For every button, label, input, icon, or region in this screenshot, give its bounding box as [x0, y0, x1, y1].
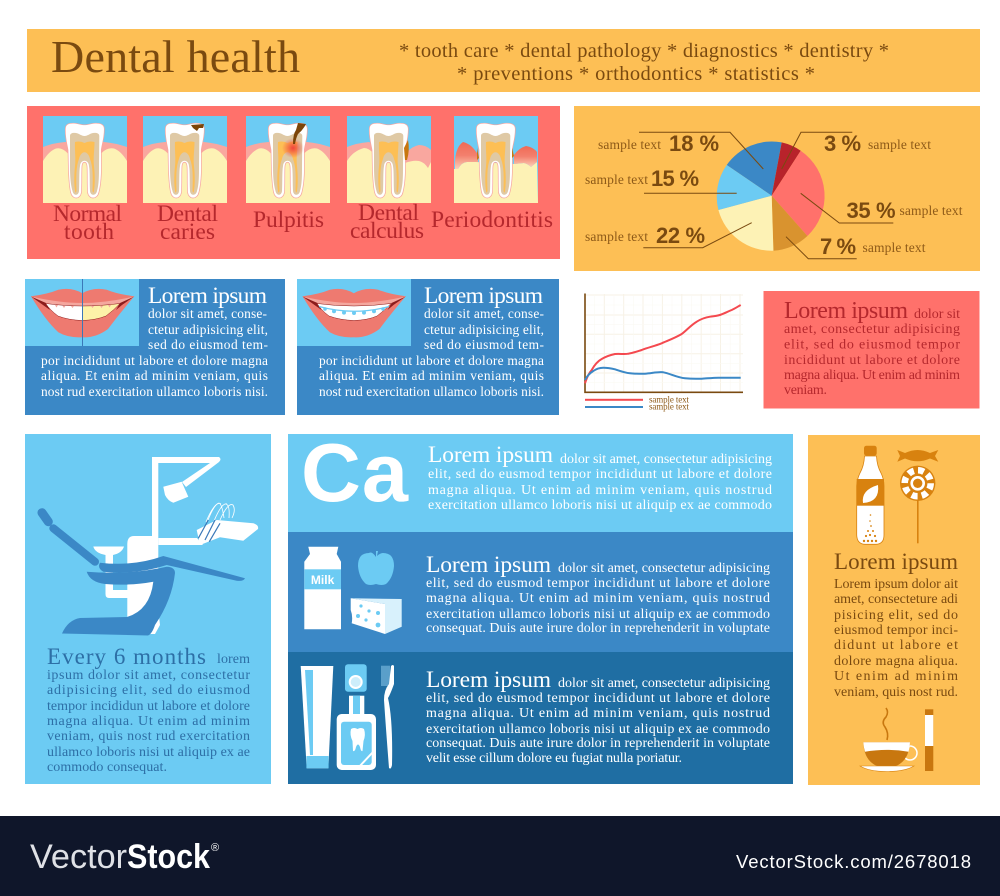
panel: dairy foods: [288, 532, 793, 652]
text: calcium: [428, 442, 772, 513]
icon: dental calculus: [347, 116, 431, 203]
text: braces: Lorem ipsum: [424, 283, 543, 309]
panel: calcium: [288, 426, 793, 532]
labels: tooth conditions: tooth: [64, 219, 114, 245]
icon: periodontitis: [454, 116, 538, 203]
text: braces: [319, 283, 544, 399]
callout: red note: veniam.: [784, 383, 827, 398]
pie label: 3 percent: 3 %: [824, 131, 861, 156]
callout: red note: amet, consectetur adipisicing: [784, 322, 960, 337]
leader lines: [639, 132, 893, 259]
icon: pulpitis: [246, 116, 330, 203]
footer brand: Stock: [127, 838, 210, 876]
icon: soda bottle: [857, 446, 884, 544]
icon: toothbrush: [381, 665, 394, 769]
panel: pie chart: [574, 106, 980, 271]
text: every 6 months: ipsum dolor sit amet, consectetur: [47, 668, 250, 683]
text: calcium: elit, sed do eusmod tempor incididunt ut labore et dolore: [428, 467, 772, 482]
text: dairy: elit, sed do eusmod tempor incididunt ut labore et dolore: [426, 576, 770, 591]
card: braces: [297, 279, 559, 415]
labels: tooth conditions: Periodontitis: [431, 207, 553, 233]
text: every 6 months: tempor incididun ut labore et dolore: [47, 699, 250, 714]
icon: dental chair: [42, 457, 258, 636]
text: harmful habits: Ut enim ad minim: [834, 669, 958, 684]
callout: red note: [764, 291, 980, 408]
text: harmful habits: didunt ut labore et: [834, 638, 958, 653]
text: braces: sed do eiusmod tem-: [424, 337, 544, 352]
text: every 6 months: Every 6 months: [47, 644, 206, 669]
pie label: 3 percent: sample text: [868, 137, 931, 152]
pie label: 35 percent: sample text: [900, 203, 963, 218]
text: whitening: Lorem ipsum: [148, 283, 267, 309]
line chart: [585, 294, 743, 412]
footer brand: Vector: [30, 838, 127, 876]
text: calcium: Lorem ipsum: [428, 442, 553, 468]
labels: tooth conditions: [53, 200, 553, 245]
text: dairy: Lorem ipsum: [426, 552, 551, 578]
text: every 6 months: veniam, quis nost rud exercitation: [47, 729, 250, 744]
text: every 6 months: adipisicing elit, sed do eiusmod: [47, 683, 250, 698]
icon: lollipop: [900, 466, 935, 543]
text: braces: por incididunt ut labore et dolore magna: [319, 353, 544, 368]
text: harmful habits: dolore magna aliqua.: [834, 654, 958, 669]
pie label: 15 percent: [585, 166, 699, 191]
callout: red note: magna aliqua. Ut enim ad minim: [784, 368, 960, 383]
pie label: 22 percent: sample text: [585, 229, 648, 244]
text: every 6 months: ullamco loboris nisi ut aliquip ex ae: [47, 745, 250, 760]
icon: cheese: [351, 598, 402, 634]
chart legend: sample text: [649, 402, 689, 412]
text: harmful habits: [834, 549, 958, 700]
text: every 6 months: commodo consequat.: [47, 760, 167, 775]
icon: Ca symbol: Ca: [301, 426, 409, 519]
text: dairy: [426, 552, 770, 636]
icon: smile with braces: [302, 289, 406, 337]
icon: coffee cup: [860, 708, 917, 772]
pie label: 18 percent: [598, 131, 719, 156]
text: whitening: por incididunt ut labore et dolore magna: [41, 353, 268, 368]
text: dairy: dolor sit amet, consectetur adipisicing: [558, 561, 770, 576]
text: harmful habits: amet, consecteture adi: [834, 592, 958, 607]
labels: tooth conditions: calculus: [350, 218, 424, 244]
text: oral hygiene: dolor sit amet, consectetur adipisicing: [558, 676, 770, 691]
title: Dental health: [51, 31, 300, 82]
pie label: 3 percent: [824, 131, 931, 156]
text: oral hygiene: magna aliqua. Ut enim ad minim veniam, quis nostrud: [426, 706, 770, 721]
text: every 6 months: magna aliqua. Ut enim ad minim: [47, 714, 250, 729]
pie label: 35 percent: [846, 198, 963, 223]
pie label: 15 percent: sample text: [585, 172, 648, 187]
text: braces: aliqua. Et enim ad minim veniam, quis: [319, 368, 544, 383]
callout: red note: incididunt ut labore et dolore: [784, 353, 960, 368]
text: calcium: magna aliqua. Ut enim ad minim veniam, quis nostrud: [428, 483, 772, 498]
text: braces: nost rud exercitation ullamco loboris nisi.: [319, 384, 544, 399]
topic keywords: [399, 40, 889, 85]
text: harmful habits: eiusmod tempor inci-: [834, 623, 958, 638]
icon: cigarette: [925, 709, 933, 771]
text: whitening: dolor sit amet, conse-: [148, 306, 267, 321]
header banner: [27, 29, 980, 92]
topic keywords: * preventions * orthodontics * statistics *: [457, 63, 815, 85]
pie label: 7 percent: [820, 234, 926, 259]
pie label: 18 percent: 18 %: [669, 131, 719, 156]
pie chart: [717, 141, 825, 251]
panel: harmful habits: [808, 435, 980, 785]
callout: red note: Lorem ipsum: [784, 298, 908, 324]
text: every 6 months: [47, 644, 250, 775]
pie label: 35 percent: 35 %: [846, 198, 896, 223]
text: every 6 months: lorem: [217, 652, 250, 667]
icon: toothpaste: [301, 666, 333, 768]
text: dairy: magna aliqua. Ut enim ad minim veniam, quis nostrud: [426, 591, 770, 606]
labels: tooth conditions: Pulpitis: [253, 207, 324, 233]
pie label: 7 percent: 7 %: [820, 234, 856, 259]
text: whitening: aliqua. Et enim ad minim veniam, quis: [41, 368, 268, 383]
text: harmful habits: pisicing elit, sed do: [834, 608, 958, 623]
text: calcium: dolor sit amet, consectetur adipisicing: [560, 452, 772, 467]
text: oral hygiene: [426, 667, 770, 766]
icon: milk carton: [304, 547, 341, 629]
text: whitening: nost rud exercitation ullamco loboris nisi.: [41, 384, 268, 399]
panel: tooth conditions: [27, 106, 560, 259]
icon: mouthwash: [337, 696, 376, 770]
labels: tooth conditions: Dental: [157, 201, 218, 227]
text: dairy: exercitation ullamco loboris nisi ut aliquip ex ae commodo: [426, 607, 770, 622]
footer brand: [30, 838, 219, 876]
icon: milk carton: Milk: [311, 573, 335, 587]
footer url: VectorStock.com/2678018: [736, 851, 971, 872]
chart legend: sample text: [649, 394, 689, 404]
text: calcium: exercitation ullamco loboris nisi ut aliquip ex ae commodo: [428, 498, 772, 513]
text: whitening: [41, 283, 268, 399]
callout: red note: elit, sed do eiusmod tempor: [784, 338, 960, 352]
text: dairy: consequat. Duis aute irure dolor in reprehenderit in voluptate: [426, 621, 770, 636]
text: oral hygiene: consequat. Duis aute irure dolor in reprehenderit in voluptate: [426, 736, 770, 751]
topic keywords: * tooth care * dental pathology * diagnostics * dentistry *: [399, 40, 889, 62]
text: oral hygiene: Lorem ipsum: [426, 667, 551, 693]
labels: tooth conditions: Dental: [358, 200, 419, 226]
text: oral hygiene: elit, sed do eusmod tempor incididunt ut labore et dolore: [426, 691, 770, 706]
labels: tooth conditions: caries: [160, 219, 215, 245]
panel: oral hygiene: [288, 652, 793, 784]
icon: wrapped candy: [897, 450, 938, 462]
pie label: 22 percent: 22 %: [656, 223, 705, 248]
panel: dental visit: [25, 434, 271, 784]
text: braces: ctetur adipisicing elit,: [424, 322, 544, 337]
footer bar: [0, 816, 1000, 896]
pie label: 18 percent: sample text: [598, 137, 661, 152]
icon: smile before and after whitening: [31, 279, 134, 346]
card: whitening: [25, 279, 285, 415]
pie label: 15 percent: 15 %: [651, 166, 699, 191]
pie label: 22 percent: [585, 223, 705, 248]
text: braces: dolor sit amet, conse-: [424, 306, 544, 321]
text: harmful habits: Lorem ipsum dolor ait: [834, 577, 958, 592]
footer brand: ®: [211, 842, 219, 854]
icon: apple: [358, 551, 394, 585]
callout: red note: dolor sit: [914, 307, 960, 322]
text: whitening: sed do eiusmod tem-: [148, 337, 268, 352]
text: harmful habits: veniam, quis nost rud.: [834, 685, 958, 700]
chart legend: [585, 394, 689, 412]
text: whitening: ctetur adipisicing elit,: [148, 322, 268, 337]
text: oral hygiene: exercitation ullamco loboris nisi ut aliquip ex ae commodo: [426, 722, 770, 737]
icon: dental caries: [143, 116, 227, 203]
icon: floss: [345, 664, 367, 692]
text: oral hygiene: velit esse cillum dolore eu fugiat nulla poriatur.: [426, 751, 682, 766]
pie label: 7 percent: sample text: [862, 240, 926, 255]
text: harmful habits: Lorem ipsum: [834, 549, 958, 574]
icon: normal tooth: [43, 116, 127, 203]
labels: tooth conditions: Normal: [53, 201, 122, 227]
